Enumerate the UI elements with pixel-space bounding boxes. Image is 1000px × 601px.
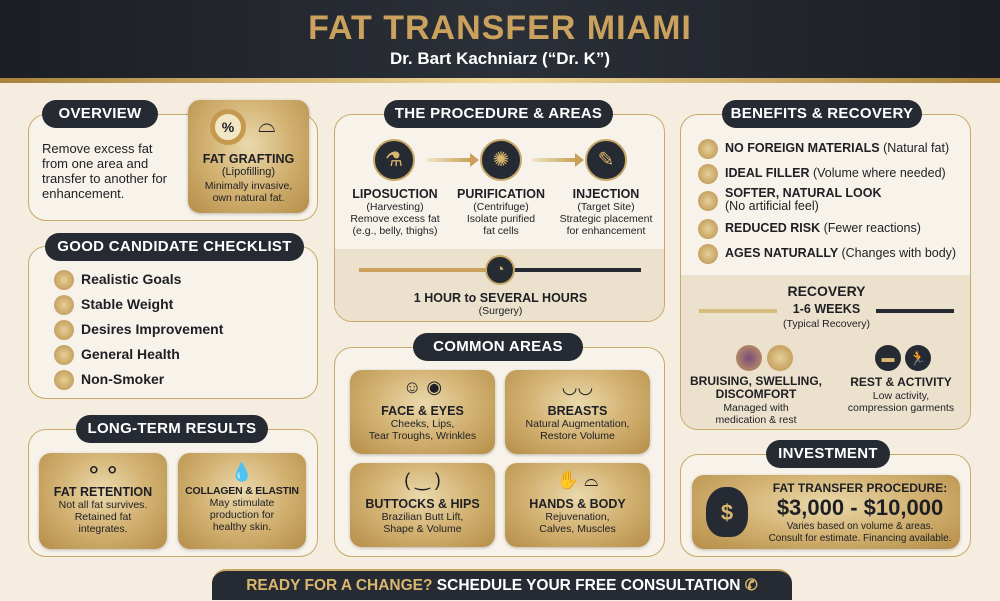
step: purification <box>457 187 545 237</box>
card: price: FAT TRANSFER PROCEDURE: <box>773 481 947 495</box>
step: injection: INJECTION <box>573 187 639 201</box>
card: breasts: Restore Volume <box>540 430 615 442</box>
card: price: $3,000 - $10,000 <box>777 495 943 520</box>
card: buttocks: ( ‿ ) <box>404 470 441 490</box>
step: liposuction: LIPOSUCTION <box>352 187 438 201</box>
panel: benefits & recovery: NO FOREIGN MATERIALS (Natural fat) <box>725 141 949 155</box>
timeline: (Surgery) <box>479 305 522 317</box>
recovery section: REST & ACTIVITY <box>850 375 952 389</box>
panel: overview <box>28 114 318 221</box>
step: purification: Isolate purified <box>467 213 535 225</box>
step: liposuction: (Harvesting) <box>366 201 424 213</box>
overview text: Remove excess fat from one area and transfer to another for enhancement. <box>42 141 167 201</box>
step: liposuction: Remove excess fat <box>350 213 440 225</box>
panel: benefits & recovery: AGES NATURALLY (Changes with body) <box>725 246 956 260</box>
card: collagen: May stimulate <box>210 497 274 509</box>
recovery section <box>681 275 972 431</box>
card: fat retention: ⚬⚬ <box>85 458 121 483</box>
card: fat grafting: (Lipofilling) <box>222 166 275 178</box>
step: injection <box>560 187 652 237</box>
recovery section: Managed with <box>723 402 789 414</box>
card: collagen: 💧 <box>231 462 253 482</box>
subtitle: Dr. Bart Kachniarz (“Dr. K”) <box>390 49 610 68</box>
panel: benefits & recovery: REDUCED RISK (Fewer reactions) <box>725 221 921 235</box>
card: fat retention: Not all fat survives. <box>59 499 147 511</box>
card: collagen <box>178 453 306 549</box>
panel: candidate checklist: Desires Improvement <box>81 321 223 337</box>
card: fat grafting: FAT GRAFTING <box>203 152 294 166</box>
icon: percent: % <box>222 119 234 135</box>
icon: liposuction <box>373 139 415 181</box>
card: collagen: COLLAGEN & ELASTIN <box>185 485 299 497</box>
panel: candidate checklist: Non-Smoker <box>81 371 164 387</box>
panel: investment <box>680 454 971 557</box>
icons: rest <box>875 345 901 371</box>
step: purification: PURIFICATION <box>457 187 545 201</box>
timeline: ◔ <box>495 261 505 278</box>
icons: rest: ▬ <box>882 350 894 365</box>
panel: long-term results <box>28 429 318 557</box>
card: face: Tear Troughs, Wrinkles <box>369 430 476 442</box>
card: fat grafting: Minimally invasive, <box>205 180 292 192</box>
overview heading <box>42 100 158 128</box>
card: fat grafting: own natural fat. <box>213 192 284 204</box>
card: buttocks: Brazilian Butt Lift, <box>382 511 463 523</box>
card: breasts: BREASTS <box>548 404 607 418</box>
card: buttocks: BUTTOCKS & HIPS <box>365 497 480 511</box>
card: collagen: production for <box>210 509 274 521</box>
recovery section: compression garments <box>848 402 954 414</box>
icon: purification <box>480 139 522 181</box>
checklist heading <box>45 233 304 261</box>
common areas heading <box>413 333 583 361</box>
step: purification: fat cells <box>483 225 519 237</box>
timeline <box>335 249 666 323</box>
icon: money bag <box>706 487 748 537</box>
step: injection: Strategic placement <box>560 213 652 225</box>
arrow <box>532 158 576 162</box>
card: fat retention: FAT RETENTION <box>54 485 152 499</box>
card: collagen: healthy skin. <box>213 521 271 533</box>
investment heading: INVESTMENT <box>778 445 878 462</box>
panel: candidate checklist: General Health <box>81 346 180 362</box>
card: fat grafting: ⌓ <box>258 112 275 137</box>
panel: benefits & recovery: (No artificial feel) <box>725 199 819 213</box>
benefits heading: BENEFITS & RECOVERY <box>731 105 913 122</box>
card: price <box>692 475 960 549</box>
step: injection: (Target Site) <box>577 201 635 213</box>
card: fat retention: integrates. <box>78 523 128 535</box>
icons: bruising <box>736 345 762 371</box>
panel: procedure <box>334 114 665 322</box>
long-term heading: LONG-TERM RESULTS <box>88 420 256 437</box>
card: price: Consult for estimate. Financing available. <box>769 533 951 544</box>
procedure heading: THE PROCEDURE & AREAS <box>395 105 602 122</box>
card: face: FACE & EYES <box>381 404 464 418</box>
card: hands: Calves, Muscles <box>539 523 616 535</box>
card: price: Varies based on volume & areas. <box>787 521 933 532</box>
card: breasts: Natural Augmentation, <box>526 418 629 430</box>
recovery section: medication & rest <box>715 414 797 426</box>
card: fat grafting <box>188 100 309 213</box>
card: face: Cheeks, Lips, <box>391 418 454 430</box>
header band <box>0 0 1000 78</box>
icon: purification: ✺ <box>493 149 509 171</box>
checklist heading: GOOD CANDIDATE CHECKLIST <box>57 238 292 255</box>
card: breasts <box>505 370 650 454</box>
card: hands: Rejuvenation, <box>545 511 610 523</box>
panel: benefits & recovery: SOFTER, NATURAL LOOK <box>725 186 881 200</box>
step: liposuction: (e.g., belly, thighs) <box>352 225 438 237</box>
step: purification: (Centrifuge) <box>473 201 529 213</box>
recovery section: BRUISING, SWELLING, <box>690 374 822 388</box>
procedure heading <box>384 100 613 128</box>
card: fat retention: Retained fat <box>75 511 131 523</box>
panel: benefits & recovery <box>680 114 971 430</box>
panel: common areas <box>334 347 665 557</box>
icon: injection: ✎ <box>598 149 614 171</box>
card: buttocks: Shape & Volume <box>383 523 462 535</box>
footer CTA <box>212 569 792 600</box>
panel: candidate checklist: Stable Weight <box>81 296 173 312</box>
common areas heading: COMMON AREAS <box>433 338 563 355</box>
card: hands: HANDS & BODY <box>529 497 626 511</box>
card: face: ☺ ◉ <box>403 377 442 397</box>
recovery section: 1-6 WEEKS <box>793 302 860 316</box>
recovery section: RECOVERY <box>787 283 866 299</box>
panel: candidate checklist <box>28 246 318 399</box>
icon: injection <box>585 139 627 181</box>
title: FAT TRANSFER MIAMI <box>308 9 692 47</box>
step: injection: for enhancement <box>567 225 645 237</box>
icon: money bag: $ <box>721 500 733 525</box>
card: face <box>350 370 495 454</box>
arrow <box>427 158 471 162</box>
icon: liposuction: ⚗ <box>385 149 403 171</box>
card: breasts: ◡◡ <box>562 377 593 397</box>
recovery section: Low activity, <box>873 390 929 402</box>
card: buttocks <box>350 463 495 547</box>
investment heading <box>766 440 890 468</box>
icon: percent <box>210 109 246 145</box>
card: hands <box>505 463 650 547</box>
step: liposuction <box>350 187 440 237</box>
panel: benefits & recovery: IDEAL FILLER (Volume where needed) <box>725 166 946 180</box>
benefits heading <box>722 100 922 128</box>
timeline: 1 HOUR to SEVERAL HOURS <box>414 291 587 305</box>
overview heading: OVERVIEW <box>58 105 141 122</box>
recovery section: 🏃 <box>909 350 927 366</box>
recovery section: (Typical Recovery) <box>783 318 870 330</box>
recovery section: DISCOMFORT <box>716 387 796 401</box>
footer CTA: READY FOR A CHANGE? SCHEDULE YOUR FREE CONSULTATION ✆ <box>246 577 758 594</box>
card: hands: ✋ ⌓ <box>557 470 598 490</box>
panel: candidate checklist: Realistic Goals <box>81 271 181 287</box>
card: fat retention <box>39 453 167 549</box>
long-term heading <box>76 415 268 443</box>
